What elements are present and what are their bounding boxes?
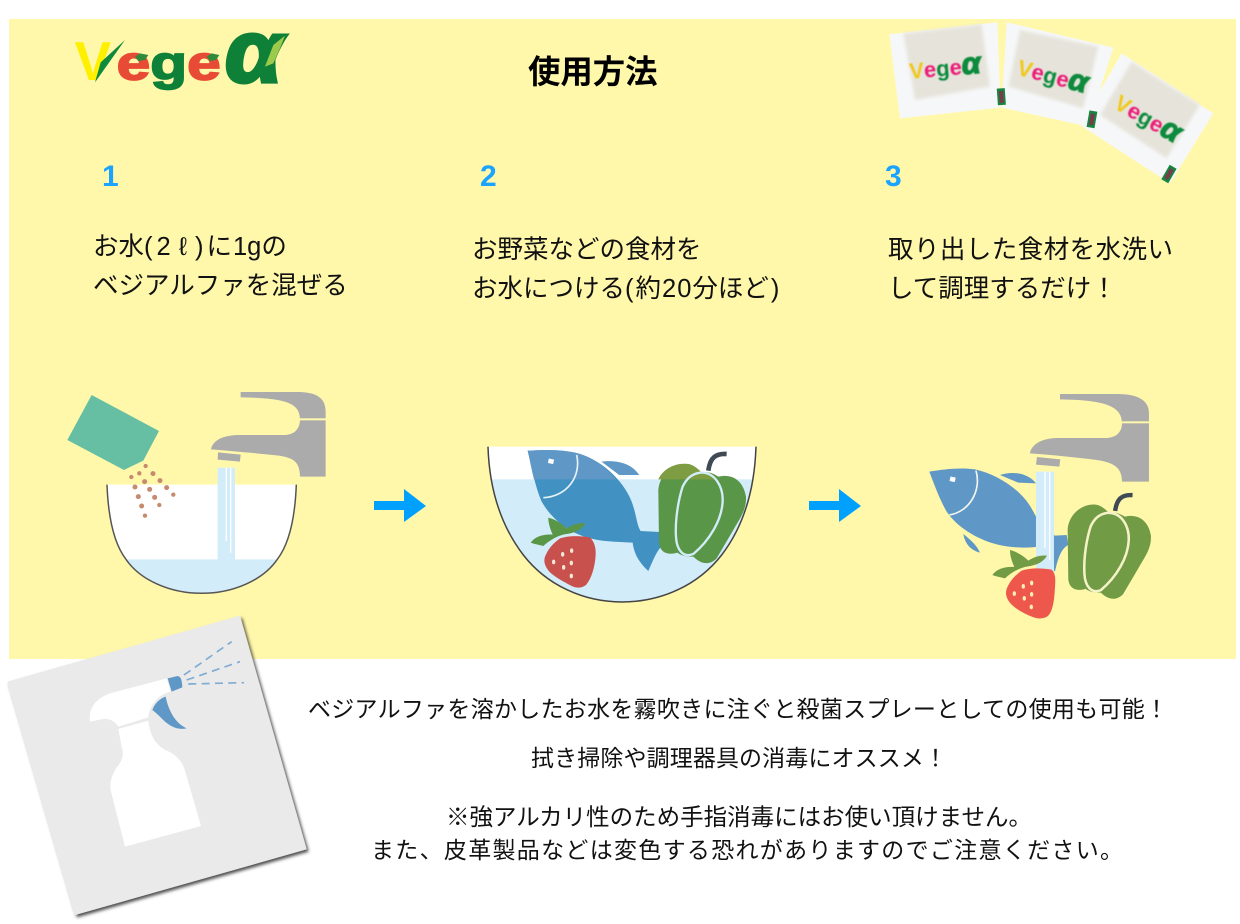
caution text: また、皮革製品などは変色する恐れがありますのでご注意ください。 [371, 837, 1123, 863]
powder sachet [67, 395, 159, 470]
pepper [658, 454, 746, 563]
step 1 text: お水(2 ℓ )に1gの [93, 233, 287, 261]
step 3 text: 取り出した食材を水洗い [888, 236, 1173, 264]
card [7, 616, 307, 915]
fish [929, 469, 1068, 572]
bowl [488, 447, 756, 602]
step 1 text: ベジアルファを混ぜる [93, 272, 348, 300]
logo: Vege alpha: α [225, 3, 287, 101]
sachet 2: Vegeα [1014, 48, 1094, 100]
logo: Vege alpha: V [75, 31, 112, 92]
pepper [1068, 495, 1151, 599]
nozzle [168, 676, 182, 692]
faucet [211, 392, 327, 477]
sachet 1: Vegeα [908, 46, 984, 86]
product photo: three sachets [889, 22, 1213, 183]
water [487, 479, 757, 603]
strawberry [992, 550, 1055, 618]
water stream [218, 468, 235, 560]
step 2 text [472, 236, 779, 303]
strawberry [531, 518, 596, 588]
spray lines [184, 642, 244, 684]
water in bowl [126, 559, 277, 593]
note text: spray use [308, 696, 1168, 771]
sachet 3 [1080, 53, 1213, 183]
note text: spray use: ベジアルファを溶かしたお水を霧吹きに注ぐと殺菌スプレーとしての使用も可能！ [308, 696, 1168, 722]
step 3 text [888, 236, 1173, 303]
step 2 text: お水につける(約20分ほど) [472, 275, 779, 303]
sachet 1 [889, 22, 1006, 118]
illustration: step 3 rinsing food under faucet [929, 394, 1151, 618]
caution text: ※強アルカリ性のため手指消毒にはお使い頂けません。 [446, 804, 1032, 830]
panel: yellow background [9, 19, 1236, 659]
sachet 3: Vegeα [1109, 84, 1190, 151]
bottle body [110, 721, 201, 847]
step 2 text: お野菜などの食材を [472, 236, 702, 264]
bowl [107, 485, 296, 593]
arrow: step 2 to 3 [809, 489, 861, 522]
sachet 2 [1002, 22, 1113, 128]
fish [528, 450, 662, 571]
trigger [152, 697, 187, 729]
illustration: step 1 bowl, faucet and powder [67, 392, 327, 593]
fish above the waterline [528, 450, 639, 479]
powder dots [129, 464, 175, 518]
step 3 number: 3 [885, 160, 902, 193]
illustration: step 2 bowl with food in water [487, 447, 757, 603]
caution text [371, 804, 1123, 863]
step 2 number: 2 [480, 160, 497, 193]
title: 使用方法 [528, 54, 658, 90]
logo: Vege alpha: ege [117, 36, 221, 90]
arrow: step 1 to 2 [374, 489, 426, 522]
step 3 text: して調理するだけ！ [888, 275, 1117, 303]
spray bottle card [7, 616, 307, 915]
step 1 number: 1 [102, 160, 119, 193]
bottle head [90, 678, 171, 727]
water stream [1036, 472, 1054, 577]
note text: spray use: 拭き掃除や調理器具の消毒にオススメ！ [531, 745, 947, 771]
faucet [1030, 394, 1150, 482]
step 1 text [93, 233, 348, 300]
logo: Vege alpha [75, 3, 287, 101]
